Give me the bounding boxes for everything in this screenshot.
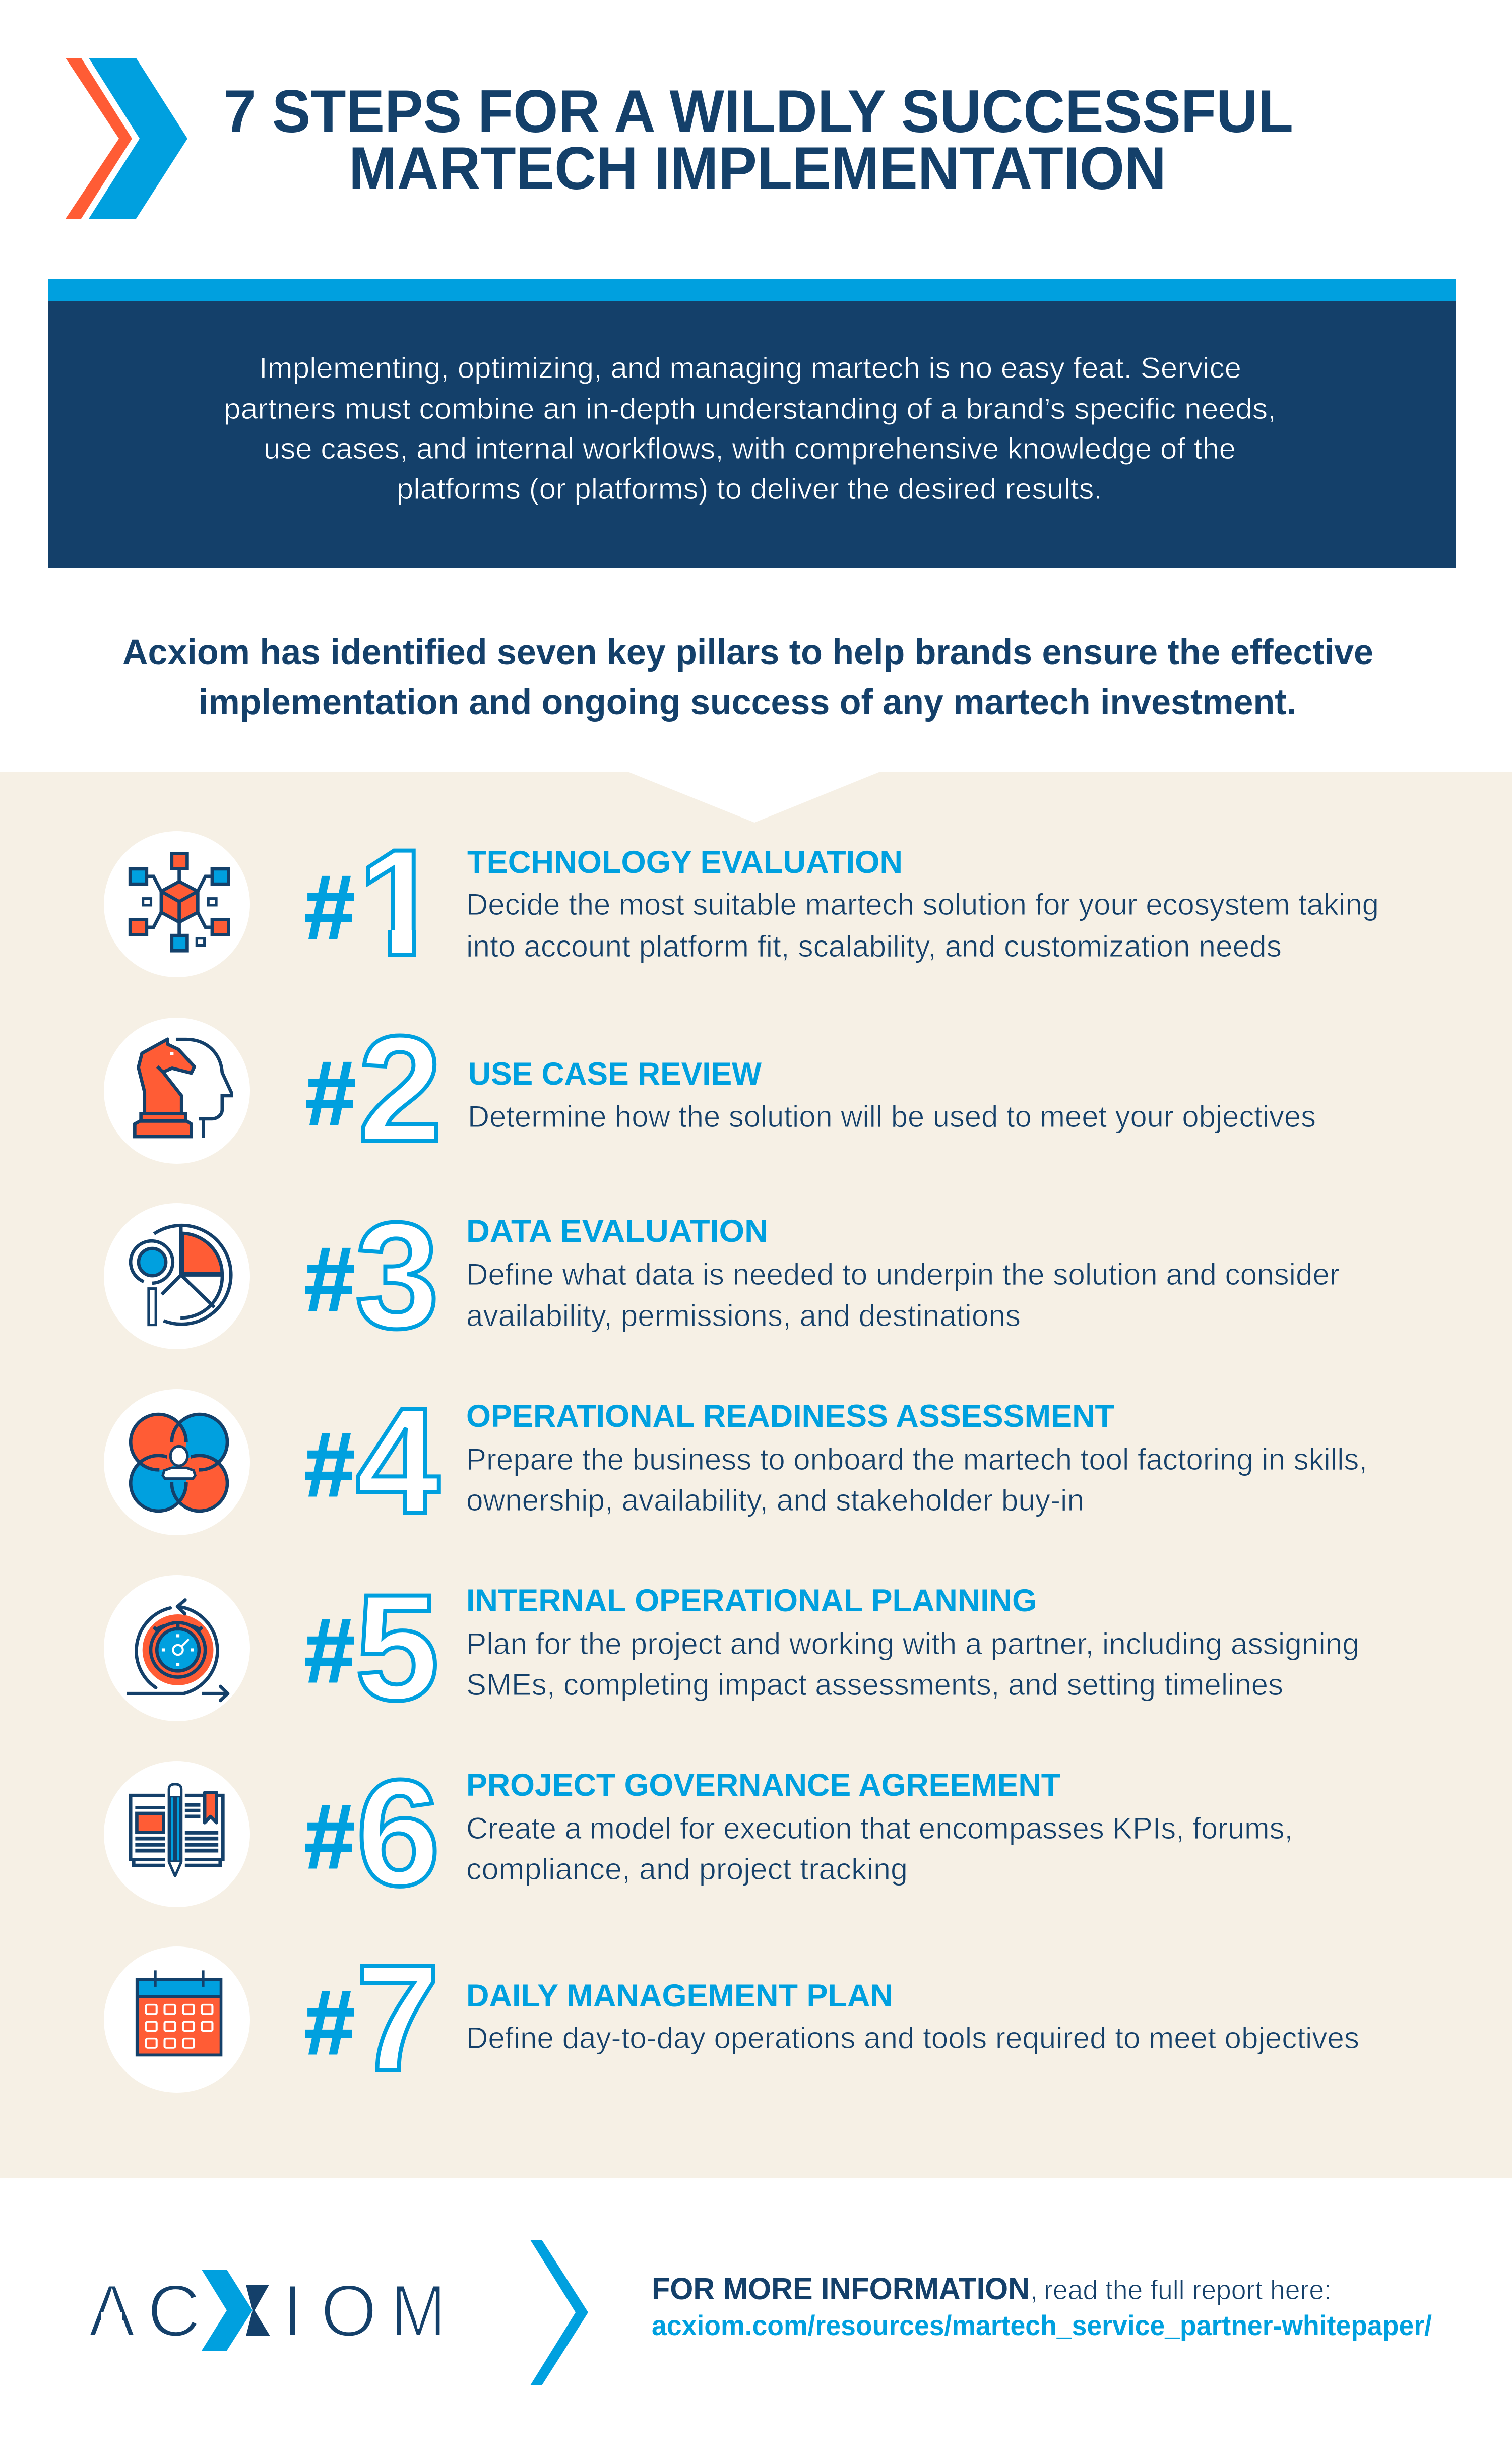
title: MARTECH IMPLEMENTATION <box>349 135 1166 202</box>
text: data evaluation: DATA EVALUATION <box>466 1214 768 1249</box>
step 3 <box>104 1190 1340 1360</box>
text: use case review: Determine how the solution will be used to meet your objectives <box>468 1100 1316 1134</box>
text: project governance agreement: PROJECT GOVERNANCE AGREEMENT <box>466 1768 1060 1803</box>
title <box>224 78 1293 202</box>
text: internal operational planning: INTERNAL OPERATIONAL PLANNING <box>466 1583 1037 1618</box>
title: 7 STEPS FOR A WILDLY SUCCESSFUL <box>224 78 1293 145</box>
icon: stopwatch with loop <box>104 1575 250 1721</box>
number 2: 2 <box>358 1004 442 1173</box>
text: technology evaluation <box>466 845 1379 963</box>
number 3: 3 <box>355 1190 439 1360</box>
number 4: # <box>304 1414 355 1516</box>
step 7 <box>104 1933 1359 2102</box>
subheading <box>122 633 1373 722</box>
text: project governance agreement <box>466 1768 1293 1886</box>
number 2 <box>305 1004 442 1173</box>
panel: steps background <box>0 772 1512 2178</box>
text: more information: read the full report here: <box>1044 2274 1332 2305</box>
icon: book and pencil <box>104 1761 250 1907</box>
text: data evaluation: Define what data is needed to underpin the solution and consider <box>466 1258 1340 1291</box>
number 5: 5 <box>355 1562 439 1732</box>
text: daily management plan: DAILY MANAGEMENT PLAN <box>466 1978 893 2014</box>
subheading: Acxiom has identified seven key pillars to help brands ensure the effective <box>122 633 1373 672</box>
number 1: 1 <box>358 818 442 987</box>
number 4: 4 <box>356 1376 440 1545</box>
text: operational readiness assessment: OPERATIONAL READINESS ASSESSMENT <box>466 1399 1114 1434</box>
text: internal operational planning: SMEs, completing impact assessments, and setting timelines <box>466 1668 1283 1702</box>
number 2: # <box>305 1043 356 1144</box>
icon: magnifier and pie chart <box>104 1203 250 1349</box>
icon: calendar <box>104 1946 250 2093</box>
text: project governance agreement: compliance, and project tracking <box>466 1852 908 1886</box>
number 7 <box>304 1933 439 2102</box>
number 5: # <box>304 1600 355 1702</box>
number 5 <box>304 1562 439 1732</box>
icon: chess knight and head <box>104 1018 250 1164</box>
text: daily management plan: Define day-to-day operations and tools required to meet objectives <box>466 2021 1359 2055</box>
text: data evaluation: availability, permissions, and destinations <box>466 1299 1021 1333</box>
panel: intro <box>48 279 1456 568</box>
number 7: # <box>304 1972 355 2074</box>
text: data evaluation <box>466 1214 1340 1333</box>
number 1 <box>305 849 416 957</box>
text: operational readiness assessment: ownership, availability, and stakeholder buy-in <box>466 1483 1084 1517</box>
number 3: # <box>304 1229 355 1330</box>
step 2 <box>104 1004 1316 1173</box>
panel: intro: platforms (or platforms) to deliver the desired results. <box>397 473 1102 506</box>
number 1: # <box>304 857 355 958</box>
step 5 <box>104 1562 1359 1732</box>
logo: acxiom <box>89 2270 446 2352</box>
text: use case review <box>468 1056 1316 1134</box>
text: daily management plan <box>466 1978 1359 2055</box>
number 4 <box>304 1376 440 1545</box>
text: use case review: USE CASE REVIEW <box>468 1056 762 1092</box>
text: technology evaluation: into account platform fit, scalability, and customization needs <box>466 929 1282 963</box>
logo: acxiom: I <box>282 2270 303 2352</box>
logo: acxiom: M <box>391 2270 446 2352</box>
text: technology evaluation: TECHNOLOGY EVALUATION <box>467 845 903 880</box>
text: internal operational planning: Plan for the project and working with a partner, including assigning <box>466 1627 1359 1661</box>
text: operational readiness assessment <box>466 1399 1367 1517</box>
panel: intro: Implementing, optimizing, and managing martech is no easy feat. Service <box>259 352 1241 385</box>
icon: footer chevron <box>530 2240 588 2385</box>
icon: venn diagram with person <box>104 1389 250 1535</box>
text: more information: FOR MORE INFORMATION <box>652 2272 1030 2306</box>
text: technology evaluation: Decide the most suitable martech solution for your ecosystem taking <box>466 888 1379 921</box>
icon: header chevron <box>66 58 187 219</box>
panel: intro: use cases, and internal workflows, with comprehensive knowledge of the <box>264 432 1236 465</box>
logo: acxiom: A <box>89 2270 136 2352</box>
icon: technology network cube <box>104 831 250 977</box>
text: internal operational planning <box>466 1583 1359 1702</box>
step 6 <box>104 1748 1293 1917</box>
number 3 <box>304 1190 439 1360</box>
text: more information <box>652 2272 1432 2341</box>
text: more information: , <box>1030 2274 1038 2305</box>
number 6: 6 <box>356 1748 440 1917</box>
step 4 <box>104 1389 1365 1535</box>
text: project governance agreement: Create a model for execution that encompasses KPIs, forums, <box>466 1811 1293 1845</box>
text: operational readiness assessment: Prepare the business to onboard the martech tool factoring in skills, <box>466 1442 1367 1476</box>
number 6 <box>304 1748 440 1917</box>
number 7: 7 <box>356 1933 439 2102</box>
number 6: # <box>304 1786 355 1888</box>
panel: intro: partners must combine an in-depth understanding of a brand’s specific needs, <box>224 393 1276 425</box>
step 1 <box>104 831 1377 977</box>
logo: acxiom: C <box>147 2270 201 2352</box>
text: more information: acxiom.com/resources/martech_service_partner-whitepaper/ <box>652 2309 1432 2341</box>
logo: acxiom: O <box>321 2270 377 2352</box>
subheading: implementation and ongoing success of any martech investment. <box>199 682 1296 722</box>
